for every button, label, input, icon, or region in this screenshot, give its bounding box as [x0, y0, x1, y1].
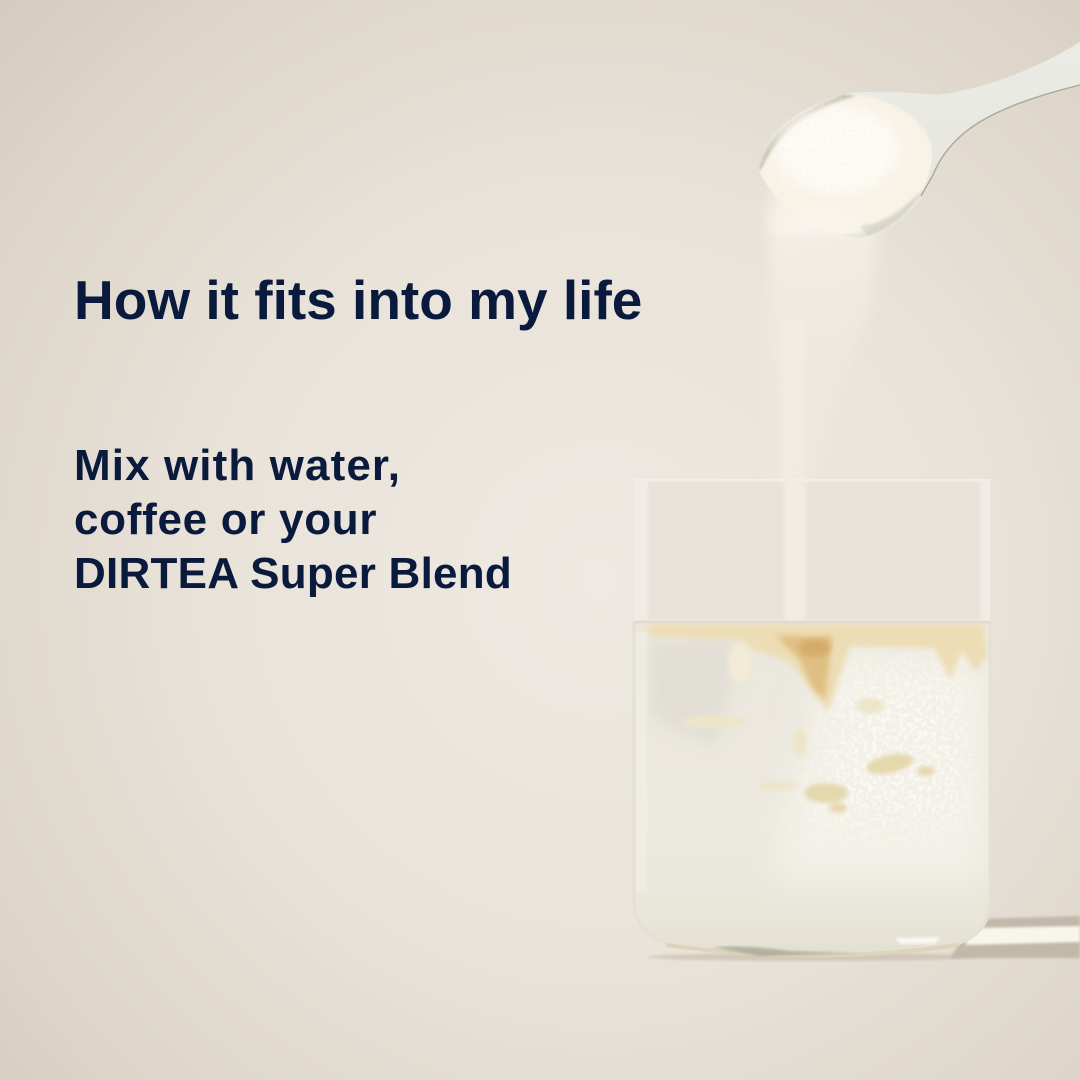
pour stream through glass	[784, 481, 806, 621]
left grey water	[654, 646, 728, 736]
bowl shadow rim	[759, 94, 860, 170]
glass upper wall	[634, 480, 990, 622]
left wall highlight	[636, 632, 647, 892]
powder in bowl	[760, 95, 935, 236]
body text: coffee or your	[74, 495, 377, 544]
base reflection	[712, 946, 860, 956]
powder blotches	[683, 698, 935, 813]
orange powder plume	[776, 636, 832, 700]
glass edges	[634, 622, 990, 955]
grey lower shade	[861, 192, 920, 236]
powder stream	[768, 190, 880, 622]
powder falling from bowl edge	[767, 208, 863, 236]
pale clump near surface	[728, 642, 749, 678]
body text: Mix with water,	[74, 441, 401, 490]
spoon handle and bowl	[758, 42, 1080, 238]
handle underside line	[921, 85, 1080, 196]
glass shadow on the table	[647, 916, 1080, 961]
body text	[74, 441, 512, 598]
surface powder layer	[646, 624, 988, 712]
body text: DIRTEA Super Blend	[74, 549, 512, 598]
spoon	[758, 42, 1080, 238]
fizz speckle	[836, 686, 948, 814]
powder grain	[762, 116, 888, 184]
glass inner panel	[648, 482, 980, 620]
title: How it fits into my life	[74, 269, 642, 331]
bright fizzing cloud	[791, 664, 972, 873]
glass base rim	[666, 945, 958, 956]
water body	[634, 622, 990, 962]
glass with water	[634, 480, 990, 962]
